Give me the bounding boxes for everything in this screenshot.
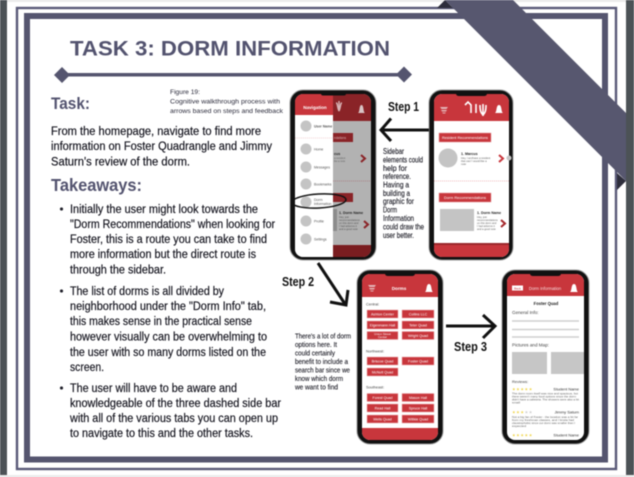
phone: dorm information detail: General Info: — [512, 310, 539, 315]
icon: menu — [440, 107, 448, 114]
phone: navigation sidebar open: cus — [334, 152, 340, 156]
takeaways list: "Dorm Recommendations" when looking for — [70, 219, 275, 231]
dorm names: Eigenmann Hall — [370, 323, 395, 327]
note: sidebar feedback: help for — [383, 163, 407, 173]
phone: navigation sidebar open: Dorm — [314, 198, 323, 202]
figure caption: Cognitive walkthrough process with — [170, 98, 280, 106]
phone: dorm list: Northwest: — [366, 350, 384, 354]
review 1: The dorm room itself was nice and spacious, but — [512, 392, 578, 396]
dorm names: Read Hall — [375, 406, 391, 410]
phone: navigation sidebar open: Home — [314, 148, 323, 152]
takeaways list: The user will have to be aware and — [70, 383, 237, 395]
review 1: ★★★★★ — [512, 386, 533, 392]
dorm names: Briscoe Quad — [372, 359, 393, 363]
task description: Saturn's review of the dorm. — [51, 156, 190, 168]
note: sidebar feedback: Information — [383, 213, 414, 223]
icon: bell — [495, 105, 503, 113]
dorm names: Collins LLC — [409, 312, 428, 316]
task description: information on Foster Quadrangle and Jimmy — [51, 141, 272, 153]
dorm names: Ashton Center — [371, 312, 395, 316]
button: dorm recommendations: Dorm Recommendations — [444, 196, 486, 200]
note: sidebar feedback: could draw the — [383, 222, 424, 232]
takeaways list — [60, 204, 281, 440]
phone: dorm information detail: Pictures and Map: — [512, 342, 549, 348]
step 3 label: Step 3 — [454, 340, 487, 354]
review 2: Jimmy Saturn: ★★★★★ — [512, 410, 533, 414]
phone: dorm information detail: Reviews: — [512, 379, 528, 384]
phone: homepage: note — [461, 162, 467, 166]
phone: navigation sidebar open: ike a note — [334, 159, 346, 163]
figure caption: arrows based on steps and feedback — [170, 108, 284, 115]
note: sidebar feedback: elements could — [383, 154, 423, 164]
phone: homepage: I had a/dorms it — [477, 224, 495, 228]
phone: navigation sidebar open — [290, 90, 376, 260]
note: sidebar feedback: building a — [383, 188, 410, 198]
phone: homepage: 1. Dorm Name — [477, 211, 501, 215]
phone: dorm list: Southeast: — [366, 386, 384, 390]
phone: navigation sidebar open: and a good note — [339, 227, 358, 231]
phone: navigation sidebar open: ndations — [334, 136, 346, 140]
arrow: step 3 — [446, 315, 495, 338]
step 1 label: Step 1 — [388, 100, 419, 114]
dorm names: Union Street — [374, 332, 391, 336]
note: sidebar feedback: graphic for — [383, 196, 414, 206]
note: search bar feedback: we want to find — [294, 382, 338, 392]
phone: dorm information detail: Back — [514, 286, 521, 290]
phone: dorm list — [357, 270, 443, 444]
phone: homepage: that can/ I would like a — [461, 159, 487, 163]
title: TASK 3: DORM INFORMATION — [70, 38, 390, 60]
note: search bar feedback: could certainly — [295, 348, 335, 358]
review 1: didn't have a cafeteria. The showers were also a bit — [512, 398, 579, 402]
phone: navigation sidebar open: User Name — [314, 124, 332, 128]
dorm names: McNutt Quad — [372, 370, 393, 374]
note: sidebar feedback: user better. — [383, 230, 414, 240]
note: sidebar feedback: Having a — [383, 180, 409, 190]
phone: homepage: and a good note — [477, 227, 496, 231]
dorm names: Spruce Hall — [409, 406, 427, 410]
takeaways list: Initially the user might look towards the — [70, 204, 258, 216]
review 2: Jimmy Saturn: Not a big fan of Foster - the location was a bit far — [512, 415, 578, 419]
note: sidebar feedback: reference. — [383, 171, 411, 181]
phone: homepage: 1. Marcus — [461, 152, 478, 156]
hand-drawn circle around dorm information — [292, 193, 346, 209]
review 2: Jimmy Saturn: from my freshman classes, and I kinda had — [512, 418, 575, 422]
takeaways list: through the sidebar. — [70, 264, 166, 276]
phone: homepage: on this dorm and — [477, 221, 497, 225]
task description — [51, 126, 272, 168]
note: sidebar feedback: Sidebar — [383, 146, 404, 156]
phone: navigation sidebar open: on this dorm and — [339, 221, 359, 225]
phone: navigation sidebar open: Information — [314, 202, 332, 206]
phone: navigation sidebar open: Navigation — [303, 105, 327, 110]
dorm names: Wright Quad — [408, 334, 428, 338]
note: search bar feedback — [294, 332, 351, 392]
takeaways list: knowledgeable of the three dashed side bar — [70, 398, 281, 410]
phone: navigation sidebar open: Settings — [314, 238, 327, 242]
review 2: Jimmy Saturn — [512, 410, 579, 428]
takeaways list: to navigate to this and the other tasks. — [70, 428, 253, 440]
review 3 — [512, 432, 580, 438]
phone: navigation sidebar open: Hey, just — [339, 215, 349, 219]
phone: navigation sidebar open: I had a/dorms it — [339, 224, 357, 228]
review 2: Jimmy Saturn: Jimmy Saturn — [555, 410, 579, 414]
dorm names: Center — [378, 335, 387, 339]
dorm names — [370, 312, 428, 421]
phone: navigation sidebar open: Messages — [314, 166, 330, 170]
button: resident recommendations — [439, 133, 491, 142]
task heading: Task: — [51, 95, 90, 113]
review 3: Student Name — [553, 432, 580, 438]
diagonal corner ribbon — [437, 0, 626, 190]
arrow: step 2 — [318, 263, 348, 305]
review 1: Student Name — [553, 386, 580, 392]
step 2 label: Step 2 — [282, 275, 314, 289]
figure caption: Figure 19: — [170, 89, 200, 96]
note: search bar feedback: There's a lot of dorm — [295, 332, 351, 340]
task description: From the homepage, navigate to find more — [51, 126, 261, 138]
review 1 — [512, 386, 580, 404]
button: resident recommendations: Resident Recommendations — [442, 136, 488, 140]
note: sidebar feedback — [383, 146, 424, 240]
phone: navigation sidebar open: a resident — [334, 156, 346, 160]
note: search bar feedback: search bar since we — [295, 366, 350, 374]
takeaways heading: Takeaways: — [51, 175, 142, 195]
phone: homepage: Hey, just — [477, 215, 487, 219]
title divider with diamonds — [54, 66, 412, 83]
dorm names: Wells Quad — [373, 417, 392, 421]
takeaways list: screen. — [70, 362, 104, 374]
review 1: small — [512, 400, 521, 404]
review 3: ★★★★★ — [512, 432, 533, 438]
phone: homepage: recommendations — [477, 218, 498, 222]
button: dorm recommendations — [439, 193, 491, 202]
dorm names: Willkie Quad — [408, 417, 428, 421]
phone: homepage: Hey, I am/have a resident — [461, 156, 491, 160]
review 2: Jimmy Saturn: expected — [512, 424, 527, 428]
phone: dorm list: Central: — [366, 302, 379, 306]
dorm names: Forest Quad — [373, 396, 392, 400]
dorm buttons — [367, 310, 434, 423]
dorm names: Teter Quad — [409, 323, 427, 327]
takeaways list: the user with so many dorms listed on the — [70, 347, 266, 359]
phone: dorm information detail — [502, 270, 589, 444]
icon: university logo — [465, 102, 486, 116]
dorm names: Mason Hall — [409, 396, 427, 400]
takeaways list: more information but the direct route is — [70, 249, 256, 261]
phone: homepage — [429, 90, 513, 260]
takeaways list: The list of dorms is all divided by — [70, 286, 224, 298]
dorm names: Foster Quad — [408, 359, 428, 363]
review 2: Jimmy Saturn: claustrophobic since our dorm was smaller than I — [512, 421, 575, 425]
note: sidebar feedback: Dorm — [383, 204, 397, 214]
phone: navigation sidebar open: 1. Dorm Name — [339, 211, 363, 215]
takeaways list: however visually can be overwhelming to — [70, 332, 267, 344]
phone: navigation sidebar open: Bookmarks — [314, 182, 332, 186]
phone: navigation sidebar open: recommendations — [339, 218, 360, 222]
takeaways list: this makes sense in the practical sense — [70, 316, 252, 328]
note: search bar feedback: benefit to include a — [295, 357, 349, 366]
phone: dorm information detail: Dorm Information — [529, 286, 562, 291]
phone: navigation sidebar open: Profile — [314, 220, 324, 224]
review 1: there weren't many food options since the dorm — [512, 394, 576, 398]
takeaways list: neighborhood under the "Dorm Info" tab, — [70, 301, 266, 313]
phone: dorm information detail: Foster Quad — [534, 301, 559, 306]
arrow: step 1 — [381, 118, 429, 141]
takeaways list: Foster, this is a route you can take to find — [70, 234, 267, 246]
takeaways list: with all of the various tabs you can open up — [69, 413, 278, 425]
note: search bar feedback: options here. It — [295, 340, 337, 349]
note: search bar feedback: know which dorm — [295, 374, 343, 383]
figure caption — [170, 89, 284, 115]
phone: dorm list: Dorms — [392, 286, 407, 291]
